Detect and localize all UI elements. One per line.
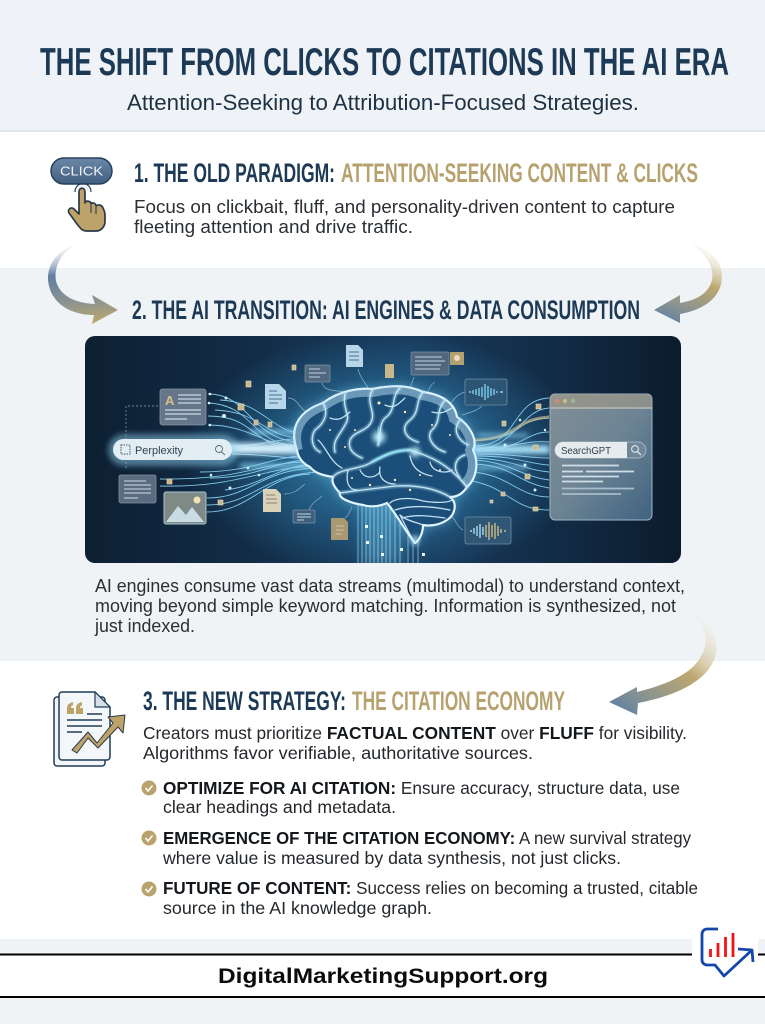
text: old paradigm description: fleeting attention and drive traffic.: [134, 217, 413, 237]
arrow: left curved: [48, 243, 118, 324]
brain folds: [312, 388, 468, 543]
bullet: optimize for AI citation: OPTIMIZE FOR AI CITATION: Ensure accuracy, structure data, use: [163, 778, 680, 798]
header: [40, 41, 729, 115]
connector wires: [126, 369, 482, 530]
text: AI transition description: [94, 576, 685, 636]
card: text block lower left: [119, 475, 156, 503]
illustration: AI brain data streams: [85, 330, 681, 580]
text: new strategy description: Algorithms favor verifiable, authoritative sources.: [143, 743, 533, 763]
icon: audio wave top: [465, 379, 507, 405]
search bar: Perplexity: [108, 434, 238, 466]
arrow: lower right curved: [609, 612, 717, 715]
heading: new strategy: 3. THE NEW STRATEGY:: [143, 686, 346, 716]
panel: AI transition: [85, 295, 685, 636]
icon: click button and hand: CLICK: [60, 164, 104, 178]
panel: new strategy: [54, 686, 698, 918]
bullet: emergence of the citation economy: EMERGENCE OF THE CITATION ECONOMY: A new survival strategy: [163, 828, 691, 848]
footer website: DigitalMarketingSupport.org: [218, 964, 548, 988]
bullet: emergence of the citation economy: [142, 828, 691, 868]
text: new strategy description: Creators must prioritize FACTUAL CONTENT over FLUFF for visibility.: [143, 723, 687, 743]
brain bright veins: [372, 427, 410, 462]
data streams: right: [466, 398, 549, 510]
stem of light: [358, 505, 425, 565]
bullet: optimize for AI citation: clear headings and metadata.: [163, 797, 396, 817]
small gold chips: [167, 365, 541, 511]
text: new strategy description: [143, 723, 687, 763]
card: article with letter A: A: [165, 393, 175, 408]
heading: old paradigm: 1. THE OLD PARADIGM:: [134, 158, 335, 188]
brain: [294, 386, 476, 544]
glowing beams: [225, 430, 550, 469]
icon: logo chart bubble: [702, 929, 753, 976]
icon: click button and hand: [51, 158, 112, 231]
footer: [0, 929, 765, 998]
card: image thumbnail: [164, 492, 206, 524]
icon: document with rising arrow: [54, 692, 125, 766]
bullet: future of content: FUTURE OF CONTENT: Success relies on becoming a trusted, citable: [163, 878, 698, 898]
browser window: SearchGPT: SearchGPT: [561, 445, 612, 457]
text: AI transition description: moving beyond simple keyword matching. Information is synthesized, not: [95, 596, 676, 616]
text: AI transition description: AI engines consume vast data streams (multimodal) to understand context,: [95, 576, 685, 596]
heading: new strategy: THE CITATION ECONOMY: [352, 686, 565, 716]
card: article with letter A: [160, 389, 206, 425]
bullet: future of content: [142, 878, 698, 918]
icon: documents: [263, 345, 464, 540]
arrow: right curved: [654, 243, 722, 323]
icon: audio wave bottom: [465, 517, 511, 544]
search bar: Perplexity: Perplexity: [135, 445, 183, 457]
bullet: future of content: source in the AI knowledge graph.: [163, 898, 432, 918]
data streams: left: [160, 394, 325, 512]
bullet: optimize for AI citation: [142, 778, 680, 817]
browser window: SearchGPT: [550, 394, 652, 520]
text: AI transition description: just indexed.: [94, 616, 195, 636]
text: old paradigm description: [134, 197, 675, 237]
brain folds, soft: [312, 388, 468, 497]
bullet: emergence of the citation economy: where value is measured by data synthesis, not just clicks.: [162, 848, 621, 868]
subtitle: Attention-Seeking to Attribution-Focused Strategies.: [127, 90, 639, 115]
text: old paradigm description: Focus on clickbait, fluff, and personality-driven content to capture: [134, 197, 675, 217]
heading: old paradigm: [134, 158, 698, 188]
stream nodes: [208, 393, 546, 492]
panel: old paradigm: [51, 158, 698, 237]
